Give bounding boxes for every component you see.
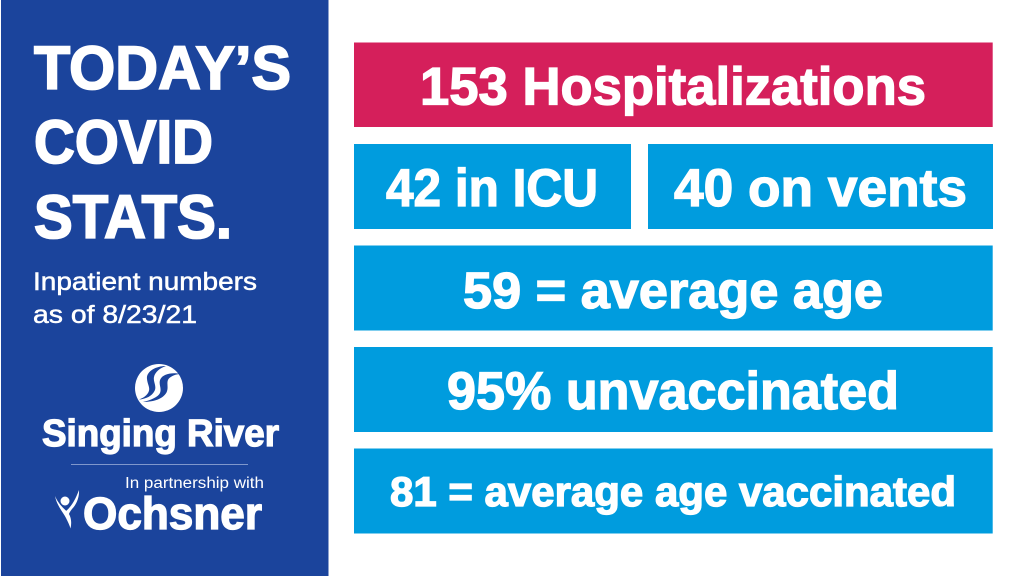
panel: average age: 59 = average age xyxy=(463,262,883,319)
text: in partnership with: In partnership with xyxy=(125,475,264,492)
logo text: Singing River: Singing River xyxy=(42,413,279,455)
panel: hospitalizations xyxy=(354,42,993,127)
heading: today's covid stats: TODAY’S xyxy=(34,34,291,102)
text block: inpatient numbers date xyxy=(33,268,257,329)
icon: Singing River logo mark xyxy=(135,364,183,412)
panel: in ICU xyxy=(354,144,631,229)
panel: in ICU: 42 in ICU xyxy=(386,159,598,218)
text block: inpatient numbers date: as of 8/23/21 xyxy=(33,301,197,329)
heading: today's covid stats: COVID xyxy=(34,108,213,176)
heading: today's covid stats xyxy=(34,34,291,251)
panel: hospitalizations: 153 Hospitalizations xyxy=(420,58,926,116)
logo text: Ochsner: Ochsner xyxy=(83,488,262,539)
panel: on vents: 40 on vents xyxy=(674,159,967,218)
panel: average age vaccinated xyxy=(354,448,993,534)
panel: unvaccinated xyxy=(354,347,993,432)
panel: on vents xyxy=(648,144,993,229)
text block: inpatient numbers date: Inpatient numbers xyxy=(33,268,257,296)
heading: today's covid stats: STATS. xyxy=(34,183,232,251)
icon: Ochsner figure xyxy=(55,490,79,528)
panel: average age vaccinated: 81 = average age vaccinated xyxy=(390,468,956,515)
panel: average age xyxy=(354,246,993,330)
panel: unvaccinated: 95% unvaccinated xyxy=(447,362,899,421)
panel: left sidebar xyxy=(1,0,328,576)
